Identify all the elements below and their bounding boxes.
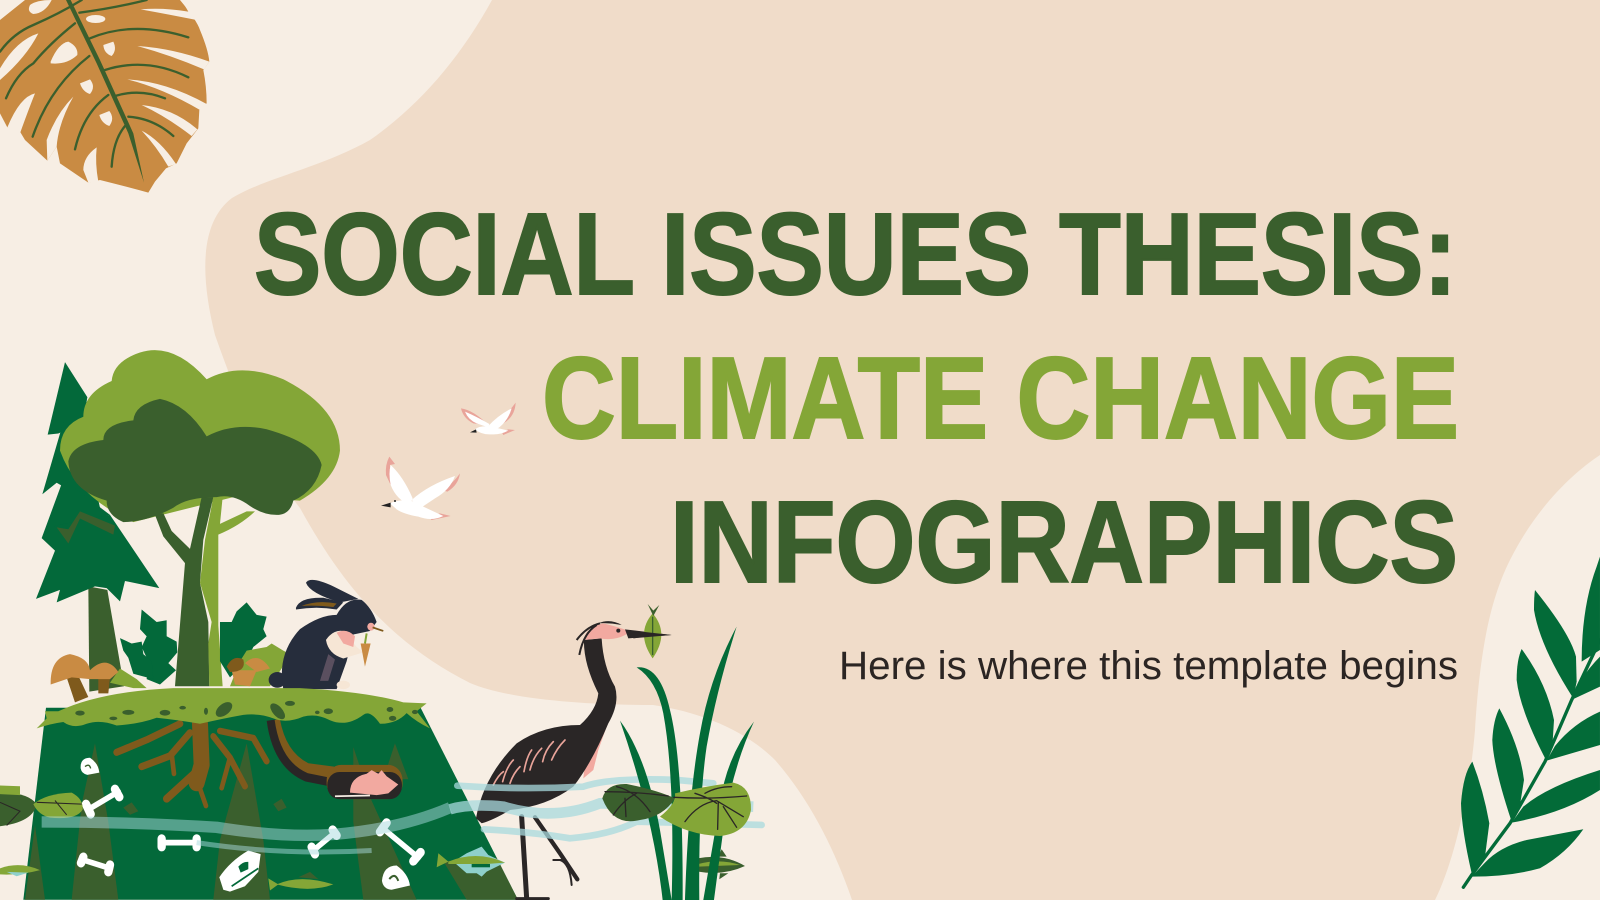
lily pads (602, 783, 751, 836)
icon: large bird (381, 457, 460, 520)
pine tree (36, 362, 159, 692)
island scene (0, 350, 518, 900)
water (450, 779, 762, 838)
grass cap (37, 688, 430, 728)
tree (60, 350, 340, 686)
burrow (271, 720, 403, 799)
heron (476, 621, 672, 899)
fish in beak (633, 604, 672, 658)
title line 1: SOCIAL ISSUES THESIS: (254, 189, 1457, 319)
icon: small bird (461, 403, 516, 435)
mound (23, 708, 518, 900)
fish (0, 865, 333, 890)
shells (81, 758, 410, 890)
roots (117, 724, 267, 806)
title line 2: CLIMATE CHANGE (542, 333, 1459, 463)
heron scene (437, 604, 762, 900)
rabbit (269, 580, 383, 689)
icon: monstera leaf (0, 0, 209, 193)
water in mound (42, 808, 450, 852)
skull (219, 851, 261, 892)
mushrooms (51, 654, 270, 702)
left lily pads (0, 786, 83, 826)
subtitle: Here is where this template begins (839, 644, 1458, 688)
fish under lily (698, 849, 745, 879)
reeds (620, 627, 754, 900)
icon: palm leaf (1461, 557, 1600, 887)
mound stripes (25, 743, 518, 900)
title line 3: INFOGRAPHICS (670, 477, 1458, 607)
bones (81, 789, 421, 872)
oak leaves (110, 602, 290, 688)
fish near mound (437, 847, 505, 877)
